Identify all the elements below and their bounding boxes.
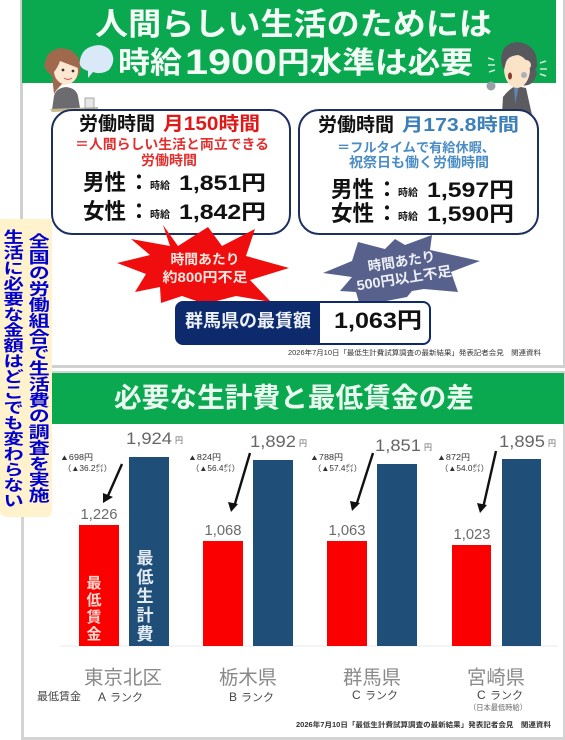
wage: female xyxy=(331,201,514,226)
group: Tochigi: 1,892 xyxy=(250,433,296,451)
group: Tokyo Kita: 1,924 xyxy=(126,430,172,448)
source note: bottom: 2026年7月10日「最低生計費試算調査の最新結果」発表記者会見 関連資料 xyxy=(296,720,551,729)
wage: male: ： xyxy=(376,177,398,202)
panel: 173.8 hours xyxy=(299,110,538,234)
callout: yellow vertical note xyxy=(0,219,52,517)
group: Tokyo Kita: 費 xyxy=(136,625,154,644)
wage: male: 時給 xyxy=(398,186,418,199)
wage: female: 1,590円 xyxy=(427,203,514,226)
group: Gunma: ランク xyxy=(365,689,398,702)
heading: 150 hours: 月150時間 xyxy=(163,113,260,135)
heading: 150 hours xyxy=(79,113,260,135)
group: Tochigi: 栃木県 xyxy=(219,667,277,689)
description: 150 hours: ＝人間らしい生活と両立できる xyxy=(75,136,269,152)
group: Tochigi: 円 xyxy=(299,439,307,448)
wage: female xyxy=(83,199,266,224)
description: 173.8 hours: 祝祭日も働く労働時間 xyxy=(349,154,489,170)
group: Tochigi: 1,068 xyxy=(204,523,242,539)
heading: 150 hours: 労働時間 xyxy=(79,113,155,135)
description: 173.8 hours xyxy=(337,139,495,170)
group: Gunma: 円 xyxy=(424,443,432,452)
title line 2 xyxy=(118,43,473,82)
wage: female: ： xyxy=(376,201,398,226)
group: Tokyo Kita: 生 xyxy=(136,587,154,606)
wage: female: ： xyxy=(128,199,150,224)
group: Tokyo Kita: 低 xyxy=(136,568,154,587)
wage: female: 1,842円 xyxy=(179,201,266,224)
group: Tokyo Kita: 最 xyxy=(86,575,102,592)
minimum wage box xyxy=(176,302,430,344)
icon: woman on phone xyxy=(44,48,98,112)
group: Miyazaki: 1,023 xyxy=(454,527,490,543)
panel: 150 hours xyxy=(52,110,290,234)
callout: gray burst: 500円以上不足 xyxy=(356,263,453,293)
heading: 173.8 hours xyxy=(318,114,519,136)
title line 2: 1900 xyxy=(185,43,277,82)
group: Gunma: ▲788円 xyxy=(310,453,343,462)
group: Tokyo Kita: 賃 xyxy=(86,609,102,626)
wage: male: 男性 xyxy=(331,177,374,202)
wage: male: 時給 xyxy=(150,179,170,192)
group: Tokyo Kita xyxy=(37,430,183,704)
title line 2: 円水準は必要 xyxy=(277,47,473,80)
group: Tokyo Kita: 東京北区 xyxy=(84,667,162,689)
group: Tokyo Kita: 最低賃金 xyxy=(37,689,81,703)
group: Miyazaki: C xyxy=(477,688,486,702)
description: 150 hours xyxy=(75,136,269,168)
bar chart xyxy=(37,430,558,712)
callout: red burst xyxy=(117,225,289,304)
group: Miyazaki: （日本最低時給） xyxy=(469,702,527,712)
description: 173.8 hours: ＝フルタイムで有給休暇、 xyxy=(337,139,495,155)
vertical text: right column: 全国の労働組合で生活費の調査を実施 xyxy=(26,233,50,503)
wage: female: 女性 xyxy=(331,201,374,226)
group: Tokyo Kita: 1,226 xyxy=(80,507,118,523)
group: Tokyo Kita: A xyxy=(98,690,106,704)
group: Tochigi: ▲824円 xyxy=(188,453,221,462)
group: Tochigi: ランク xyxy=(241,691,274,704)
group: Gunma: C xyxy=(352,688,361,702)
description: 150 hours: 労働時間 xyxy=(141,152,197,168)
wage: male: 1,851円 xyxy=(179,172,266,195)
callout: red burst: 約800円不足 xyxy=(162,269,248,285)
panel: bottom header: 必要な生計費と最低賃金の差 xyxy=(114,382,474,413)
callout: gray burst: 時間あたり xyxy=(367,248,436,274)
source note: top: 2026年7月10日「最低生計費試算調査の最新結果」発表記者会見 関連資料 xyxy=(288,348,541,357)
wage: male: 男性 xyxy=(83,170,126,195)
group: Miyazaki: ▲872円 xyxy=(437,453,470,462)
wage: male: 1,597円 xyxy=(427,179,514,202)
group: Miyazaki xyxy=(437,433,556,712)
callout: red burst: 時間あたり xyxy=(170,251,240,267)
group: Tochigi: （▲56.4㌽） xyxy=(191,463,240,473)
group: Miyazaki: （▲54.0㌽） xyxy=(440,463,489,473)
icon: worried man xyxy=(486,42,547,115)
panel: bottom header xyxy=(52,373,564,424)
group: Gunma: 1,063 xyxy=(328,523,366,539)
group: Tokyo Kita: （▲36.2㌽） xyxy=(63,463,112,473)
group: Miyazaki: 1,895 xyxy=(499,433,545,451)
panel: top header xyxy=(22,0,556,83)
group: Tokyo Kita: 円 xyxy=(175,436,183,445)
group: Tokyo Kita: 金 xyxy=(86,625,102,643)
wage: male xyxy=(331,177,514,202)
title line 2: 時給 xyxy=(118,47,182,80)
wage: male: ： xyxy=(128,170,150,195)
heading: 173.8 hours: 月173.8時間 xyxy=(402,115,519,135)
group: Tochigi: B xyxy=(229,690,237,704)
icon: thought bubble xyxy=(80,45,113,78)
group: Gunma: 群馬県 xyxy=(343,667,401,689)
wage: male xyxy=(83,170,266,195)
wage: female: 時給 xyxy=(398,210,418,223)
vertical text: left column: 生活に必要な金額はどこでも変わらない xyxy=(1,229,24,508)
group: Tokyo Kita: 最 xyxy=(136,549,154,568)
label: Gunma minimum wage: 群馬県の最賃額 xyxy=(185,311,311,331)
title line 1: 人間らしい生活のためには xyxy=(95,7,492,42)
group: Tokyo Kita: ランク xyxy=(110,691,143,704)
group: Miyazaki: 円 xyxy=(548,439,556,448)
group: Gunma xyxy=(310,437,432,702)
wage: female: 時給 xyxy=(150,208,170,221)
group: Miyazaki: 宮崎県 xyxy=(467,667,525,689)
group: Miyazaki: ランク xyxy=(490,689,523,702)
wage: female: 女性 xyxy=(83,199,126,224)
heading: 173.8 hours: 労働時間 xyxy=(318,114,394,136)
callout: gray burst xyxy=(323,235,480,306)
value: 1,063 yen: 1,063円 xyxy=(334,308,422,333)
group: Tokyo Kita: ▲698円 xyxy=(60,453,93,462)
group: Tokyo Kita: 計 xyxy=(136,606,154,625)
group: Tokyo Kita: 低 xyxy=(86,592,102,609)
group: Tochigi xyxy=(188,433,307,704)
group: Gunma: （▲57.4㌽） xyxy=(313,463,362,473)
group: Gunma: 1,851 xyxy=(375,437,421,455)
